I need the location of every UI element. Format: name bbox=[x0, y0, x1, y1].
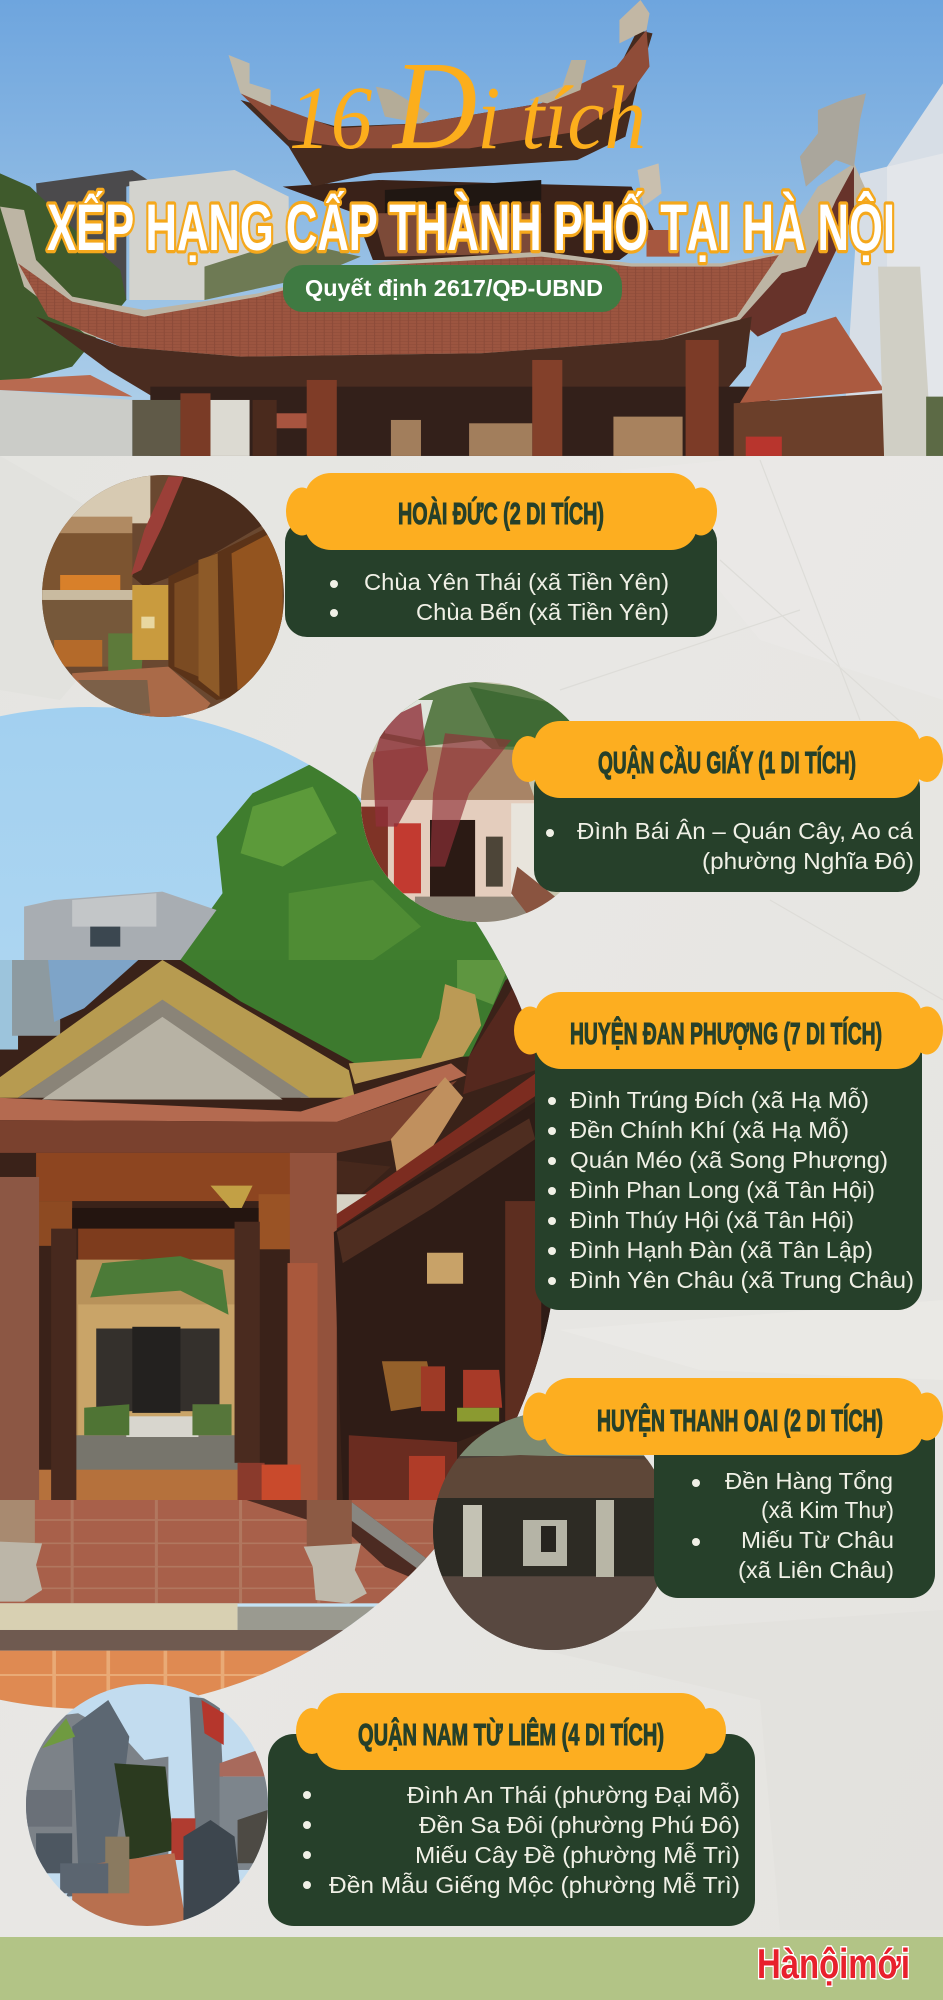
panel body bbox=[285, 520, 717, 637]
panel body bbox=[268, 1734, 755, 1926]
heading ribbon bbox=[286, 473, 717, 550]
place list: Chùa Bến (xã Tiền Yên) bbox=[416, 599, 669, 625]
panel body bbox=[654, 1420, 935, 1598]
place list: Đình An Thái (phường Đại Mỗ) bbox=[407, 1782, 740, 1808]
panel body bbox=[534, 765, 920, 892]
panel: Quận Cầu Giấy bbox=[512, 721, 943, 892]
place list: Đình Trúng Đích (xã Hạ Mỗ) bbox=[570, 1087, 869, 1113]
place list: Đền Sa Đôi (phường Phú Đô) bbox=[419, 1812, 740, 1838]
badge: decision number bbox=[283, 265, 622, 312]
place list: (xã Kim Thư) bbox=[761, 1497, 894, 1523]
panel: Hoài Đức bbox=[285, 473, 717, 637]
place list bbox=[692, 1468, 894, 1583]
place list: Đền Mẫu Giếng Mộc (phường Mễ Trì) bbox=[329, 1872, 740, 1898]
heading ribbon bbox=[514, 992, 943, 1069]
place list bbox=[330, 569, 669, 625]
place list: Đình Phan Long (xã Tân Hội) bbox=[570, 1177, 875, 1203]
footer band bbox=[0, 1937, 943, 2000]
photo: Hoài Đức temple circle bbox=[36, 470, 290, 720]
place list: Quán Méo (xã Song Phượng) bbox=[570, 1147, 888, 1173]
place list: Đình Yên Châu (xã Trung Châu) bbox=[570, 1267, 914, 1293]
badge: decision number: Quyết định 2617/QĐ-UBND bbox=[305, 275, 603, 301]
place list: Đền Chính Khí (xã Hạ Mỗ) bbox=[570, 1117, 849, 1143]
photo: Cầu Giấy temple circle bbox=[361, 682, 570, 922]
heading ribbon bbox=[296, 1693, 726, 1770]
photo: Nam Từ Liêm gate circle bbox=[20, 1680, 275, 1930]
photo: large temple gate circle bbox=[0, 700, 570, 1713]
panel: Quận Nam Từ Liêm bbox=[268, 1693, 755, 1926]
heading ribbon: QUẬN NAM TỪ LIÊM (4 DI TÍCH) bbox=[358, 1716, 664, 1752]
heading ribbon bbox=[512, 721, 943, 798]
place list: Đình Thúy Hội (xã Tân Hội) bbox=[570, 1207, 854, 1233]
heading ribbon: HOÀI ĐỨC (2 DI TÍCH) bbox=[398, 495, 604, 531]
place list: Đền Hàng Tổng bbox=[725, 1468, 893, 1494]
place list: Miếu Từ Châu bbox=[741, 1527, 894, 1553]
place list: (phường Nghĩa Đô) bbox=[702, 848, 914, 874]
place list: Đình Hạnh Đàn (xã Tân Lập) bbox=[570, 1237, 873, 1263]
place list: (xã Liên Châu) bbox=[738, 1557, 894, 1583]
place list: Miếu Cây Đề (phường Mễ Trì) bbox=[415, 1842, 740, 1868]
heading ribbon bbox=[523, 1378, 943, 1455]
panel: Huyện Thanh Oai bbox=[523, 1378, 943, 1598]
place list bbox=[303, 1782, 740, 1898]
place list bbox=[548, 1087, 914, 1293]
photo: Thanh Oai temple circle bbox=[433, 1416, 658, 1650]
panel body bbox=[535, 1030, 922, 1310]
place list bbox=[546, 818, 914, 874]
place list: Chùa Yên Thái (xã Tiền Yên) bbox=[364, 569, 669, 595]
header photo: temple roof and sky bbox=[0, 0, 943, 456]
place list: Đình Bái Ân – Quán Cây, Ao cá bbox=[577, 818, 913, 844]
panel: Huyện Đan Phượng bbox=[514, 992, 943, 1310]
title: 16 Di tích: 16 Di tích bbox=[289, 37, 646, 176]
